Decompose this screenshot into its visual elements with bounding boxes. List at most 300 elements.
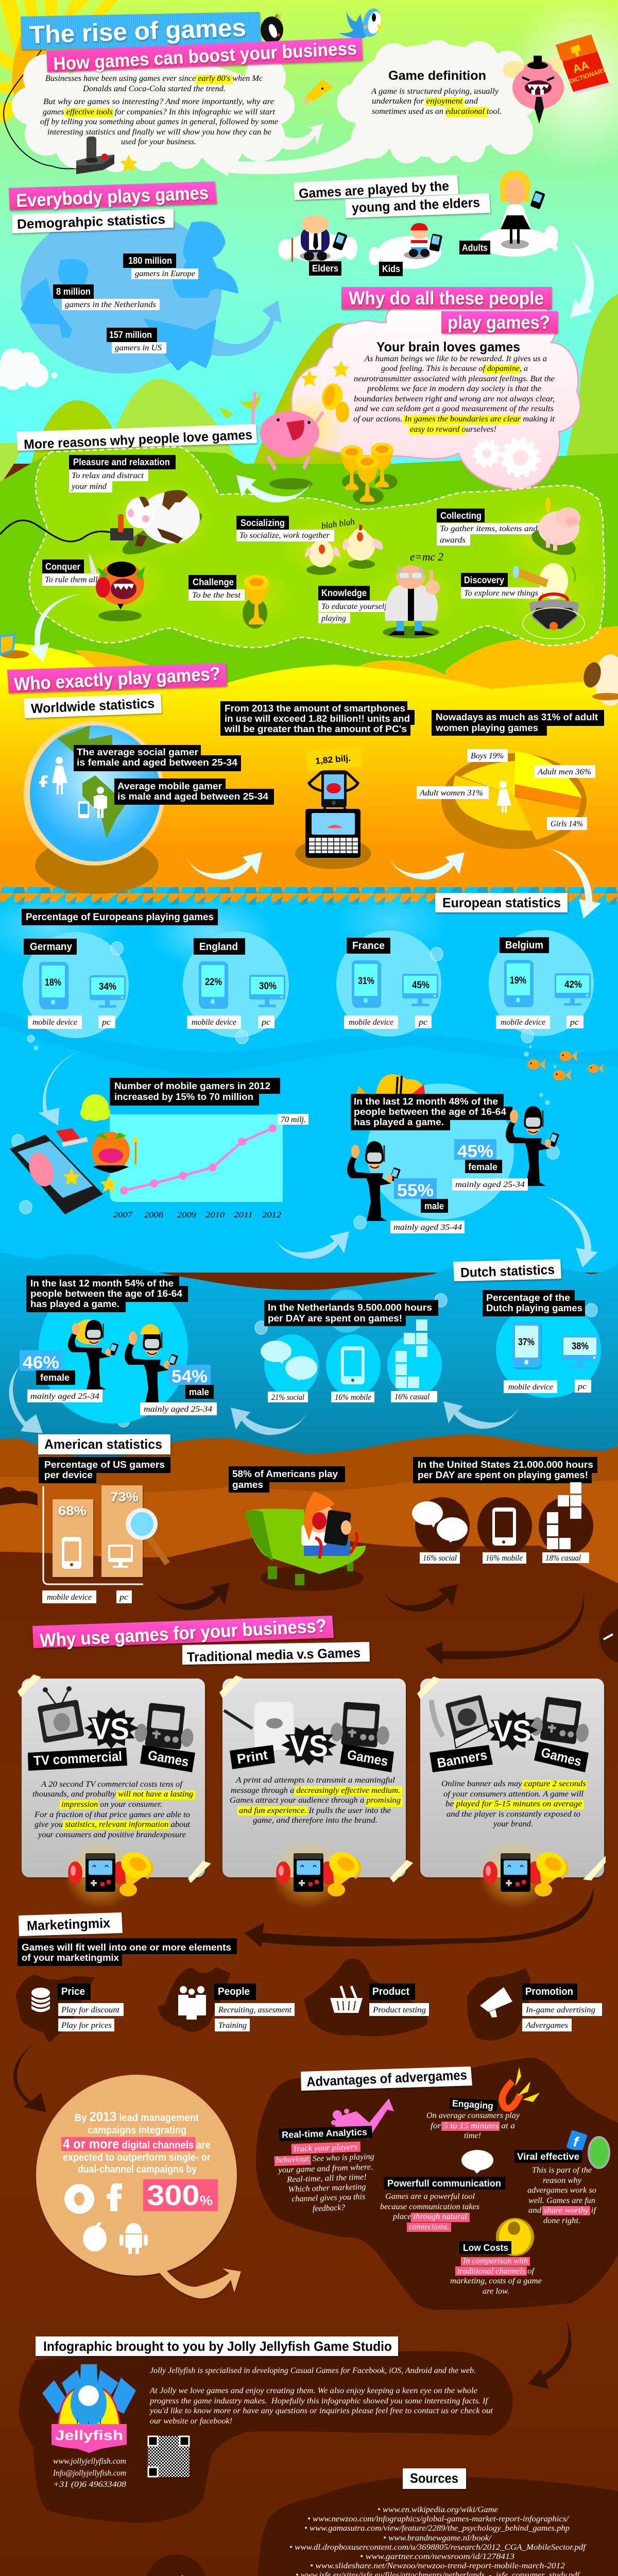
chart year axis: 2011 [234,1211,253,1219]
text block: game definition: undertaken for enjoyment and [372,97,478,106]
source list: • www.newzoo.com/infographics/global-games-market-report-infographics/ [307,2515,570,2523]
decoration: skull hole [145,2554,207,2576]
text block: about: Jolly Jellyfish is specialised in developing Casual Games for Facebook, iOS, Android and the web. [150,2366,476,2375]
label: 180 million: gamers in Europe [135,269,195,278]
character: pig [528,497,580,560]
heading: more reasons why people love games: More reasons why people love games [24,427,252,452]
label: 54 percent text [26,1276,188,1312]
text block: viral effective: This is part of the [532,2166,592,2175]
text: e=mc2: e=mc 2 [410,550,443,563]
arrows: dutch section [9,1366,521,1435]
map continents [21,222,238,371]
icon: stars [301,361,349,386]
body text: of our actions. In games the boundaries are clear making it [353,415,555,423]
peach bubble [36,2075,241,2298]
label: average social gamer [74,745,241,771]
stat: 55 percent male: 55% [397,1181,434,1200]
body text: be played for 5-15 minutes on average [445,1800,582,1808]
text block: real-time analytics: your game and from where. [277,2163,373,2175]
character: kid [404,223,442,259]
globe [24,721,165,894]
panel: print vs games [219,1675,413,1909]
label: engaging: Engaging [452,2098,494,2111]
background: left hills [0,294,618,495]
label: 8 million [53,284,160,310]
text block: about: progress the game industry makes. Hopefully this infographic showed you some interesting facts. If [149,2397,489,2405]
icon: apple [83,2222,107,2251]
body text: game, and therefore into the brand. [253,1816,377,1825]
illustration: game winning [271,1839,363,1909]
text block: viral effective: done right. [543,2216,580,2225]
panel: dutch percentages: Dutch playing games [486,1303,582,1313]
stat: 54 percent male: male [189,1387,209,1397]
panel: us hours: per DAY are spent on playing games! [418,1470,588,1480]
label: socializing: Socializing [241,518,285,528]
label: pleasure and relaxation [69,455,176,493]
label: pleasure and relaxation: your mind [71,482,107,491]
label: 157 million: gamers in US [115,344,162,352]
label: discovery: To explore new things [464,589,538,598]
text block: low costs: traditional channels of [457,2267,536,2276]
text block: viral effective: advergames work so [527,2186,596,2195]
panel: germany: 18% [45,977,61,988]
panel: banners vs games [417,1676,606,1909]
text block: powerfull communication: because communication takes [380,2202,479,2211]
body text: problems we face in modern day society is that the [367,384,541,393]
panel: england: mobile device [192,1018,236,1027]
label: women playing [432,710,604,736]
stat: 55 percent male: mainly aged 35-44 [393,1223,462,1232]
label: In the Netherlands 9.500.000 hours [268,1302,432,1313]
label: low costs: Low Costs [463,2243,508,2253]
icon: game channel [64,2184,94,2214]
illustration: game winning [63,1839,155,1909]
panel: belgium: mobile device [501,1018,545,1027]
source list [282,2505,592,2576]
source list: • www.gamasutra.com/view/feature/2289/the_psychology_behind_games.php [304,2524,570,2533]
text block: powerfull communication: connections. [409,2223,449,2231]
body text: As human beings we like to be rewarded. It gives us a [364,354,547,363]
arrow: phone to pie [387,852,465,879]
text block: powerfull communication: Games are a powerful tool [385,2192,475,2201]
icon: star [120,155,138,172]
label: 157 million [107,328,166,353]
panel: americans play: games [232,1480,263,1490]
panel: americans play: 58% of Americans play [232,1469,338,1479]
stat: 46 percent female: 46% [23,1353,59,1372]
heading: Your brain loves games [376,339,520,354]
body text [441,1780,586,1828]
icon: print paper [224,1702,294,1750]
label: 8 million: 8 million [56,286,91,297]
body text: By 2013 lead management [75,2109,199,2124]
labels: 16% mobile [486,1554,523,1563]
label: games: Games [346,1747,389,1769]
chart year axis: 2009 [177,1211,196,1219]
labels: 16% mobile [335,1393,371,1402]
label: socializing [236,516,334,541]
label: average mobile gamer: is male and aged between 25-34 [117,791,268,802]
panel: france: pc [418,1018,427,1027]
panel: your brain loves games [273,301,580,489]
panel: france: 45% [412,980,430,991]
character: cow [110,490,207,562]
icon: people [178,1986,206,2020]
text block: engaging: for 5 to 15 minutes at a [431,2122,515,2130]
panel: dutch percentages [483,1290,601,1398]
icon: star [100,1176,117,1192]
heading: Advantages of advergames [306,2067,468,2090]
background: earth layer 2 [0,1477,618,1597]
panel: germany [23,932,129,1038]
icon: growth arrow [331,2098,394,2139]
icon: android [119,2223,148,2254]
highlights [237,1786,403,1816]
label: 54 percent text: In the last 12 month 54% of the [30,1278,174,1289]
panel: belgium [489,930,594,1036]
body text: dual-channel campaigns by [78,2164,197,2175]
character: jelly [80,1094,110,1121]
label: Percentage of US gamers [44,1460,165,1470]
heading: european statistics: European statistics [442,895,561,910]
arrows: dark american [152,1583,584,1665]
icon: facebook and slime: f [571,2133,581,2150]
icon: gameboy [330,1701,391,1748]
label: collecting [437,509,552,546]
icon: gameboy [529,1695,593,1746]
panel: sources [138,2468,618,2576]
panel: netherlands hours [261,1290,442,1402]
icon: dictionary book [556,35,613,94]
icon: speech bubble [461,2150,493,2174]
label: knowledge [318,586,410,623]
source list: • www.gartner.com/newsroom/id/1278413 [360,2552,514,2561]
axis labels: pc [119,1593,128,1602]
icon: magnifier [126,1508,167,1564]
stat: 300 percent: 300 % [147,2179,213,2211]
panel: belgium: 42% [564,979,582,990]
source list: • www.en.wikipedia.org/wiki/Game [377,2505,498,2514]
label: games [340,1744,394,1772]
heading banner: everybody plays games: Everybody plays games [15,182,209,211]
label: smartphones: From 2013 the amount of smartphones [225,703,405,714]
label: elders [309,261,341,276]
panel: germany: pc [101,1018,111,1027]
body text: your brand. [492,1820,533,1828]
character: elder [291,215,348,262]
label [39,1457,170,1483]
label: knowledge: To educate yourself while [321,602,407,611]
label: socializing: To socialize, work together [239,531,330,540]
label: collecting: Collecting [440,511,482,521]
icon: tetris blocks [547,1482,581,1549]
panel: marketing mix price: Play for discount [61,2006,120,2014]
icon: magnet [502,2067,540,2108]
chart end label: 70 milj. [281,1115,306,1124]
text block: intro: games effective tools for companies? In this infographic we will start [43,108,276,116]
heading: games are played by the young and the elders: Games are played by the [298,178,450,201]
label: knowledge: playing [321,614,346,623]
text block: about: you'd like to know more or have any questions or inquiries please feel free to contact us or check out [149,2406,493,2415]
icon: dictionary book: DICTIONARY [569,66,607,85]
icon: trophy held by brain [319,381,349,422]
background: yellow-orange section [0,626,618,907]
cloud: intro [12,54,295,172]
text block: low costs [450,2257,542,2296]
panel: european gamer split [347,1074,559,1233]
label: number of mobile gamers [110,1078,280,1106]
body text [230,1776,401,1825]
heading: traditional media vs games: Traditional media v.s Games [187,1645,360,1665]
panel: marketing mix promotion: Promotion [525,1986,573,1997]
label: per device [44,1470,93,1480]
icon: joystick [76,137,114,174]
text block: real-time analytics [274,2141,376,2214]
background: sky [0,0,618,464]
body text: For a fraction of that price games are able to [34,1810,190,1819]
icon: phone [62,1537,81,1569]
source list: • www.dl.dropboxusercontent.com/u/3698805/research/2012_CGA_MobileSector.pdf [289,2543,587,2552]
text block: about: At Jolly we love games and enjoy creating them. We also enjoy keeping a keen eye on the whole [149,2386,477,2395]
sphere [24,721,165,866]
label [264,1300,438,1326]
panel: marketing mix product: Product testing [372,2006,426,2014]
icon: challenge trophy [243,575,269,629]
body text: Online banner ads may capture 2 seconds [441,1780,586,1788]
heading banner: why do all these people play games [341,287,558,333]
arrow: reasons to who [29,594,81,662]
label: 48 percent text: people between the age of 16-64 [354,1107,506,1117]
arrow: to dutch statistics [546,1197,598,1267]
text block: real-time analytics: Real-time, all the time! [286,2173,367,2184]
label: pleasure and relaxation: Pleasure and relaxation [73,457,170,467]
dark blob [138,2477,618,2576]
label: percentage of europeans: Percentage of Europeans playing games [26,912,214,923]
text block: engaging: On average consumers play [426,2111,520,2120]
panel: germany: Germany [30,941,73,953]
body text: A print ad attempts to transmit a meaningful [235,1776,396,1785]
panel: england: England [199,941,238,953]
panel: dutch gamer split [20,1274,217,1423]
label: collecting: awards [440,536,466,545]
decoration: air bubbles [12,942,597,1427]
text block: intro: Businesses have been using games ever since early 80's when Mc [45,74,263,83]
background: deep water [0,1252,618,1458]
label: 48 percent text: has played a game. [354,1117,444,1127]
icon: coin [496,2218,534,2256]
illustration: tilted phone with monsters [10,1128,138,1214]
icon: male with mobile [78,787,107,818]
text block: engaging [426,2111,520,2140]
icon: dictionary book: AA [571,58,591,76]
icon: speech bubbles [261,1341,317,1381]
cow cable [0,520,110,541]
stat: 45 percent female [452,1139,528,1191]
character: chickens [305,524,383,575]
contact details: +31 (0)6 49633408 [53,2480,126,2489]
icon: speech bubbles [412,1501,468,1543]
text block: intro: But why are games so interesting? And more importantly, why are [43,97,274,106]
chart year axis: 2008 [144,1211,163,1219]
contact details [53,2457,126,2489]
text block: low costs: In comparison with [462,2257,528,2265]
heading: worldwide statistics: Worldwide statistics [30,696,155,716]
label: elders: Elders [312,263,338,274]
panel: england: pc [261,1018,270,1027]
icon: tetris blocks [396,1319,427,1388]
pie chart: players [417,749,595,849]
label: challenge: Challenge [193,577,234,587]
label: marketingmix intro [18,1938,237,1966]
background: water [0,902,618,1273]
label: number of mobile gamers: increased by 15% to 70 million [114,1092,253,1102]
text block: powerfull communication: place through natural [392,2212,468,2221]
decoration: cup at left [0,635,29,658]
text block: real-time analytics: Track your players [293,2143,357,2154]
character: pirate monster [89,553,145,621]
background: earth layer 1 [0,1434,618,1597]
chart year axis: 2012 [262,1211,281,1219]
panel: france [336,930,441,1037]
label: banners: Banners [436,1747,488,1771]
icon: megaphone [480,1987,512,2018]
icon: basket [330,1986,363,2013]
icon: pc [108,1545,133,1568]
label: 180 million [123,253,198,279]
logo: jellyfish [42,2364,136,2453]
label: average mobile gamer [114,778,274,805]
heading: marketingmix: Marketingmix [27,1915,111,1934]
panel: marketing mix people: Recruiting, assesment [218,2006,292,2014]
pie labels: Girls 14% [551,820,583,828]
label: per DAY are spent on games! [268,1313,402,1324]
label: average social gamer: is female and aged between 25-34 [77,757,237,768]
text block: game definition: A game is structured playing, usually [371,87,499,96]
stat: 46 percent female: female [40,1372,70,1383]
character: yellow fish [356,1074,425,1094]
highlights [454,1780,587,1809]
panel: england: 30% [259,981,277,992]
stat: 45 percent female: 45% [457,1142,493,1161]
pie labels: Adult men 36% [537,768,591,776]
arrow: elders to brain [570,240,594,318]
icon: trophies on the lawn [340,443,398,505]
body text: easy to reward ourselves! [410,425,496,434]
panel: belgium: Belgium [505,940,543,951]
label: number of mobile gamers: Number of mobile gamers in 2012 [114,1081,270,1091]
label: women playing: women playing games [435,723,538,733]
body text: of your consumers attention. A game will [443,1790,584,1799]
panel: marketing mix price: Price [61,1986,85,1997]
stat: 45 percent female: mainly aged 25-34 [455,1180,525,1189]
label: print: Print [236,1747,269,1767]
label: marketingmix intro: Games will fit well into one or more elements [22,1942,231,1953]
arrow: chart to dutch [271,1231,349,1259]
label: discovery [461,573,542,599]
body text: impression on your consumer. [61,1800,162,1809]
background: water surface waves [0,887,618,905]
illustration: game winning [478,1839,570,1909]
labels: 16% casual [394,1393,430,1401]
panel: germany: 34% [99,981,116,992]
arrow: advantages to studio [528,2319,572,2389]
map bubble [21,209,282,374]
highlights [403,365,521,434]
label: pleasure and relaxation: To relax and distract [72,471,144,480]
body text: thousands, and probalby will not have a lasting [32,1790,193,1799]
label: smartphones: in use will exceed 1.82 billion!! units and [225,714,410,724]
heading: Sources [410,2470,458,2486]
body text [353,354,555,434]
arrow: brain to reasons [236,475,314,502]
text block: real-time analytics: channel gives you this [291,2192,366,2204]
background: green ground [0,448,618,685]
blob with dashed border [29,447,605,657]
panel: france: mobile device [349,1018,393,1027]
decoration: lava [0,1487,38,1505]
labels: 18% casual [545,1554,581,1563]
label: kids [379,262,403,276]
character: robot with light bulb [513,563,585,639]
heading: games are played by the young and the elders: young and the elders [351,195,480,215]
icon: tv [37,1686,84,1743]
heading: marketingmix [19,1912,123,1936]
chart year axis [113,1211,281,1219]
logo: jellyfish: Jellyfish [55,2428,123,2443]
panel: england: 22% [205,977,222,988]
labels [268,1391,437,1402]
yellow glow [273,392,345,464]
panel: lead management [36,2075,241,2298]
text block: real-time analytics: Which other marketing [288,2182,366,2194]
text block: game definition: Game definition [388,69,486,83]
character: scientist [383,565,440,638]
panel: dutch percentages: mobile device [508,1383,553,1392]
panel: tv commercial vs games [18,1674,211,1909]
body text: Games attract your audience through a promising [230,1796,401,1805]
body text: good feeling. This is because of dopamine, a [381,364,528,373]
icon: female [497,781,511,812]
label: powerfull communication: Powerfull communication [387,2178,501,2189]
label: conquer: To rule them all! [45,575,100,584]
label: collecting: To gather items, tokens and/or [440,524,548,533]
vs burst: VS [290,1730,328,1763]
character: male diver [347,1141,401,1221]
label: games: Games [147,1747,190,1770]
label: 8 million: gamers in the Netherlands [65,300,156,309]
label: knowledge: Knowledge [321,588,367,598]
title banner: The rise of games [29,14,247,49]
panel: dutch percentages: 37% [518,1337,535,1348]
icon: bomb [261,12,283,43]
tape [18,1674,211,1883]
text block: about: our website or facebook! [150,2417,232,2426]
axis labels: mobile device [47,1593,92,1602]
icon: gameboy [133,1702,196,1751]
label: average social gamer: The average social gamer [77,747,198,757]
source list: • www.brandnewgame.nl/book/ [383,2534,492,2543]
text block: real-time analytics: feedback? [313,2204,345,2213]
heading banner: why use games for your business: Why use games for your business? [39,1615,327,1651]
label: conquer [42,560,104,586]
sun [0,0,118,124]
panel: advantages of advergames [256,2057,618,2310]
body text [63,2109,211,2175]
icon: pencil [304,79,333,105]
labels [420,1552,589,1564]
pie labels: Adult women 31% [419,789,483,798]
panel: dutch percentages: Percentage of the [486,1293,570,1303]
